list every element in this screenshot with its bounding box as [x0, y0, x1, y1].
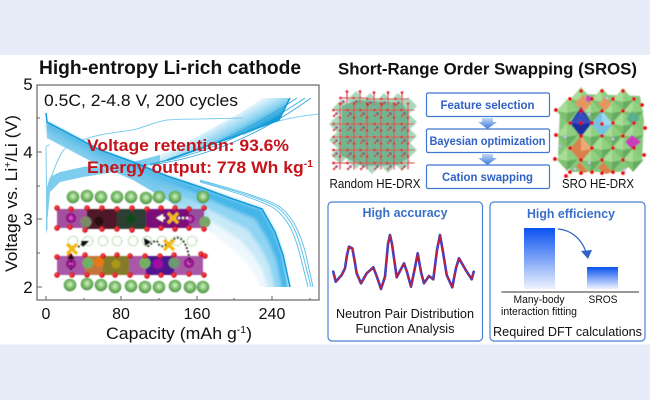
- x axis labels: 80: [112, 306, 130, 323]
- label: SRO HE-DRX: SRO HE-DRX: [562, 177, 635, 191]
- x axis labels: [42, 306, 285, 323]
- x axis labels: 240: [259, 306, 285, 323]
- step: Bayesian optimization: Bayesian optimization: [430, 134, 546, 148]
- y axis title: +: [3, 162, 14, 168]
- x axis title: Capacity (mAh g: [106, 324, 232, 343]
- energy output callout: Energy output: 778 Wh kg: [87, 158, 297, 177]
- arrow: to optimization: [478, 118, 497, 129]
- flow: SROS steps: [426, 93, 550, 188]
- x axis labels: 0: [42, 306, 51, 323]
- panel: voltage capacity chart: [2, 75, 319, 343]
- test conditions: 0.5C, 2-4.8 V, 200 cycles: [44, 92, 238, 110]
- line chart: neutron PDF: [333, 235, 474, 289]
- energy output callout: -1: [304, 159, 313, 170]
- crystal structure inset: [54, 190, 211, 293]
- bar labels: interaction fitting: [501, 306, 577, 318]
- x axis title: -1: [237, 325, 247, 336]
- heading: high accuracy: High accuracy: [362, 205, 448, 220]
- blocked swap markers: [67, 213, 178, 254]
- icon: random HE-DRX crystal: [329, 90, 417, 174]
- chart frame and axes: [37, 85, 319, 300]
- step: feature selection: Feature selection: [440, 98, 534, 112]
- bar chart: required calculations: [502, 228, 639, 292]
- y axis labels: [23, 75, 33, 297]
- y axis labels: 3: [23, 210, 33, 229]
- arrow: reduction: [558, 229, 592, 259]
- step: cation swapping: Cation swapping: [442, 170, 533, 184]
- x axis labels: 160: [184, 306, 210, 323]
- y axis labels: 4: [23, 143, 33, 162]
- bar labels: [501, 294, 618, 318]
- bar labels: Many-body: [514, 294, 565, 306]
- caption: neutron PDF: Function Analysis: [356, 321, 455, 336]
- y axis labels: 5: [23, 75, 33, 94]
- x axis title: ): [246, 324, 252, 343]
- y axis title: Voltage vs. Li: [2, 171, 21, 272]
- migration paths: [71, 238, 190, 270]
- y axis labels: 2: [23, 278, 33, 297]
- label: random HE-DRX: Random HE-DRX: [330, 177, 421, 191]
- icon: SRO HE-DRX crystal: [553, 87, 647, 178]
- heading: high efficiency: High efficiency: [527, 206, 616, 221]
- title: SROS: Short-Range Order Swapping (SROS): [338, 60, 637, 78]
- caption: required DFT: Required DFT calculations: [493, 324, 642, 339]
- voltage retention callout: Voltage retention: 93.6%: [87, 136, 289, 155]
- y axis title: /Li (V): [2, 115, 21, 162]
- arrow: to cation swapping: [478, 154, 497, 165]
- panel: high efficiency: [490, 202, 645, 341]
- chart curves: [46, 98, 319, 295]
- bar labels: SROS: [588, 294, 618, 306]
- caption: neutron PDF: [336, 306, 474, 336]
- panel: high accuracy: [328, 202, 482, 341]
- caption: neutron PDF: Neutron Pair Distribution: [336, 306, 474, 321]
- title: high-entropy cathode: High-entropy Li-rich cathode: [39, 58, 301, 79]
